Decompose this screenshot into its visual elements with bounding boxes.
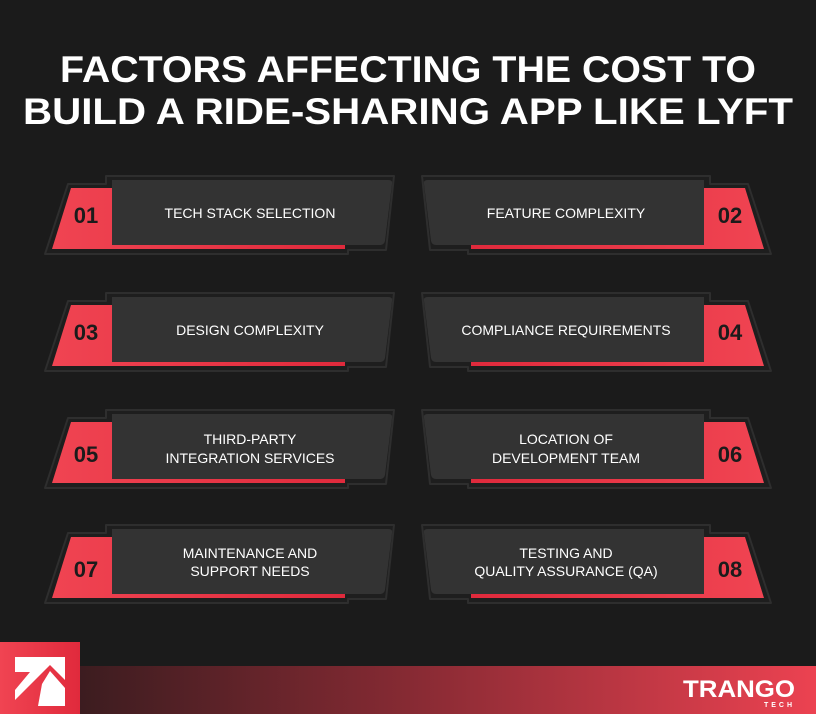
card 02: FEATURE COMPLEXITY	[487, 205, 646, 221]
card 07: SUPPORT NEEDS	[190, 563, 310, 579]
card 05: 05	[74, 442, 98, 467]
card 06: 06	[718, 442, 742, 467]
footer bar	[0, 666, 816, 714]
card 04: 04	[718, 320, 743, 345]
card 04	[422, 293, 771, 371]
card 06	[422, 410, 771, 488]
card 07: 07	[74, 557, 98, 582]
brand text: TRANGO	[683, 676, 795, 703]
card 05: THIRD-PARTY	[204, 431, 297, 447]
title	[23, 49, 793, 132]
card 01	[45, 176, 394, 254]
card 05: INTEGRATION SERVICES	[165, 450, 335, 466]
card 07	[45, 525, 394, 603]
card 02	[422, 176, 771, 254]
card 08: TESTING AND	[519, 545, 613, 561]
card 02: 02	[718, 203, 742, 228]
card 01: 01	[74, 203, 98, 228]
card 04: COMPLIANCE REQUIREMENTS	[461, 322, 671, 338]
card 06: DEVELOPMENT TEAM	[492, 450, 640, 466]
card 05	[45, 410, 394, 488]
card 07: MAINTENANCE AND	[183, 545, 317, 561]
card 03: DESIGN COMPLEXITY	[176, 322, 325, 338]
title: FACTORS AFFECTING THE COST TO	[60, 49, 756, 90]
brand text: TECH	[764, 702, 795, 709]
logo square	[0, 642, 80, 714]
card 03	[45, 293, 394, 371]
card 08: QUALITY ASSURANCE (QA)	[474, 563, 658, 579]
card 06: LOCATION OF	[519, 431, 613, 447]
title: BUILD A RIDE-SHARING APP LIKE LYFT	[23, 91, 793, 132]
card 03: 03	[74, 320, 98, 345]
card 08	[422, 525, 771, 603]
card 08: 08	[718, 557, 742, 582]
card 01: TECH STACK SELECTION	[165, 205, 335, 221]
